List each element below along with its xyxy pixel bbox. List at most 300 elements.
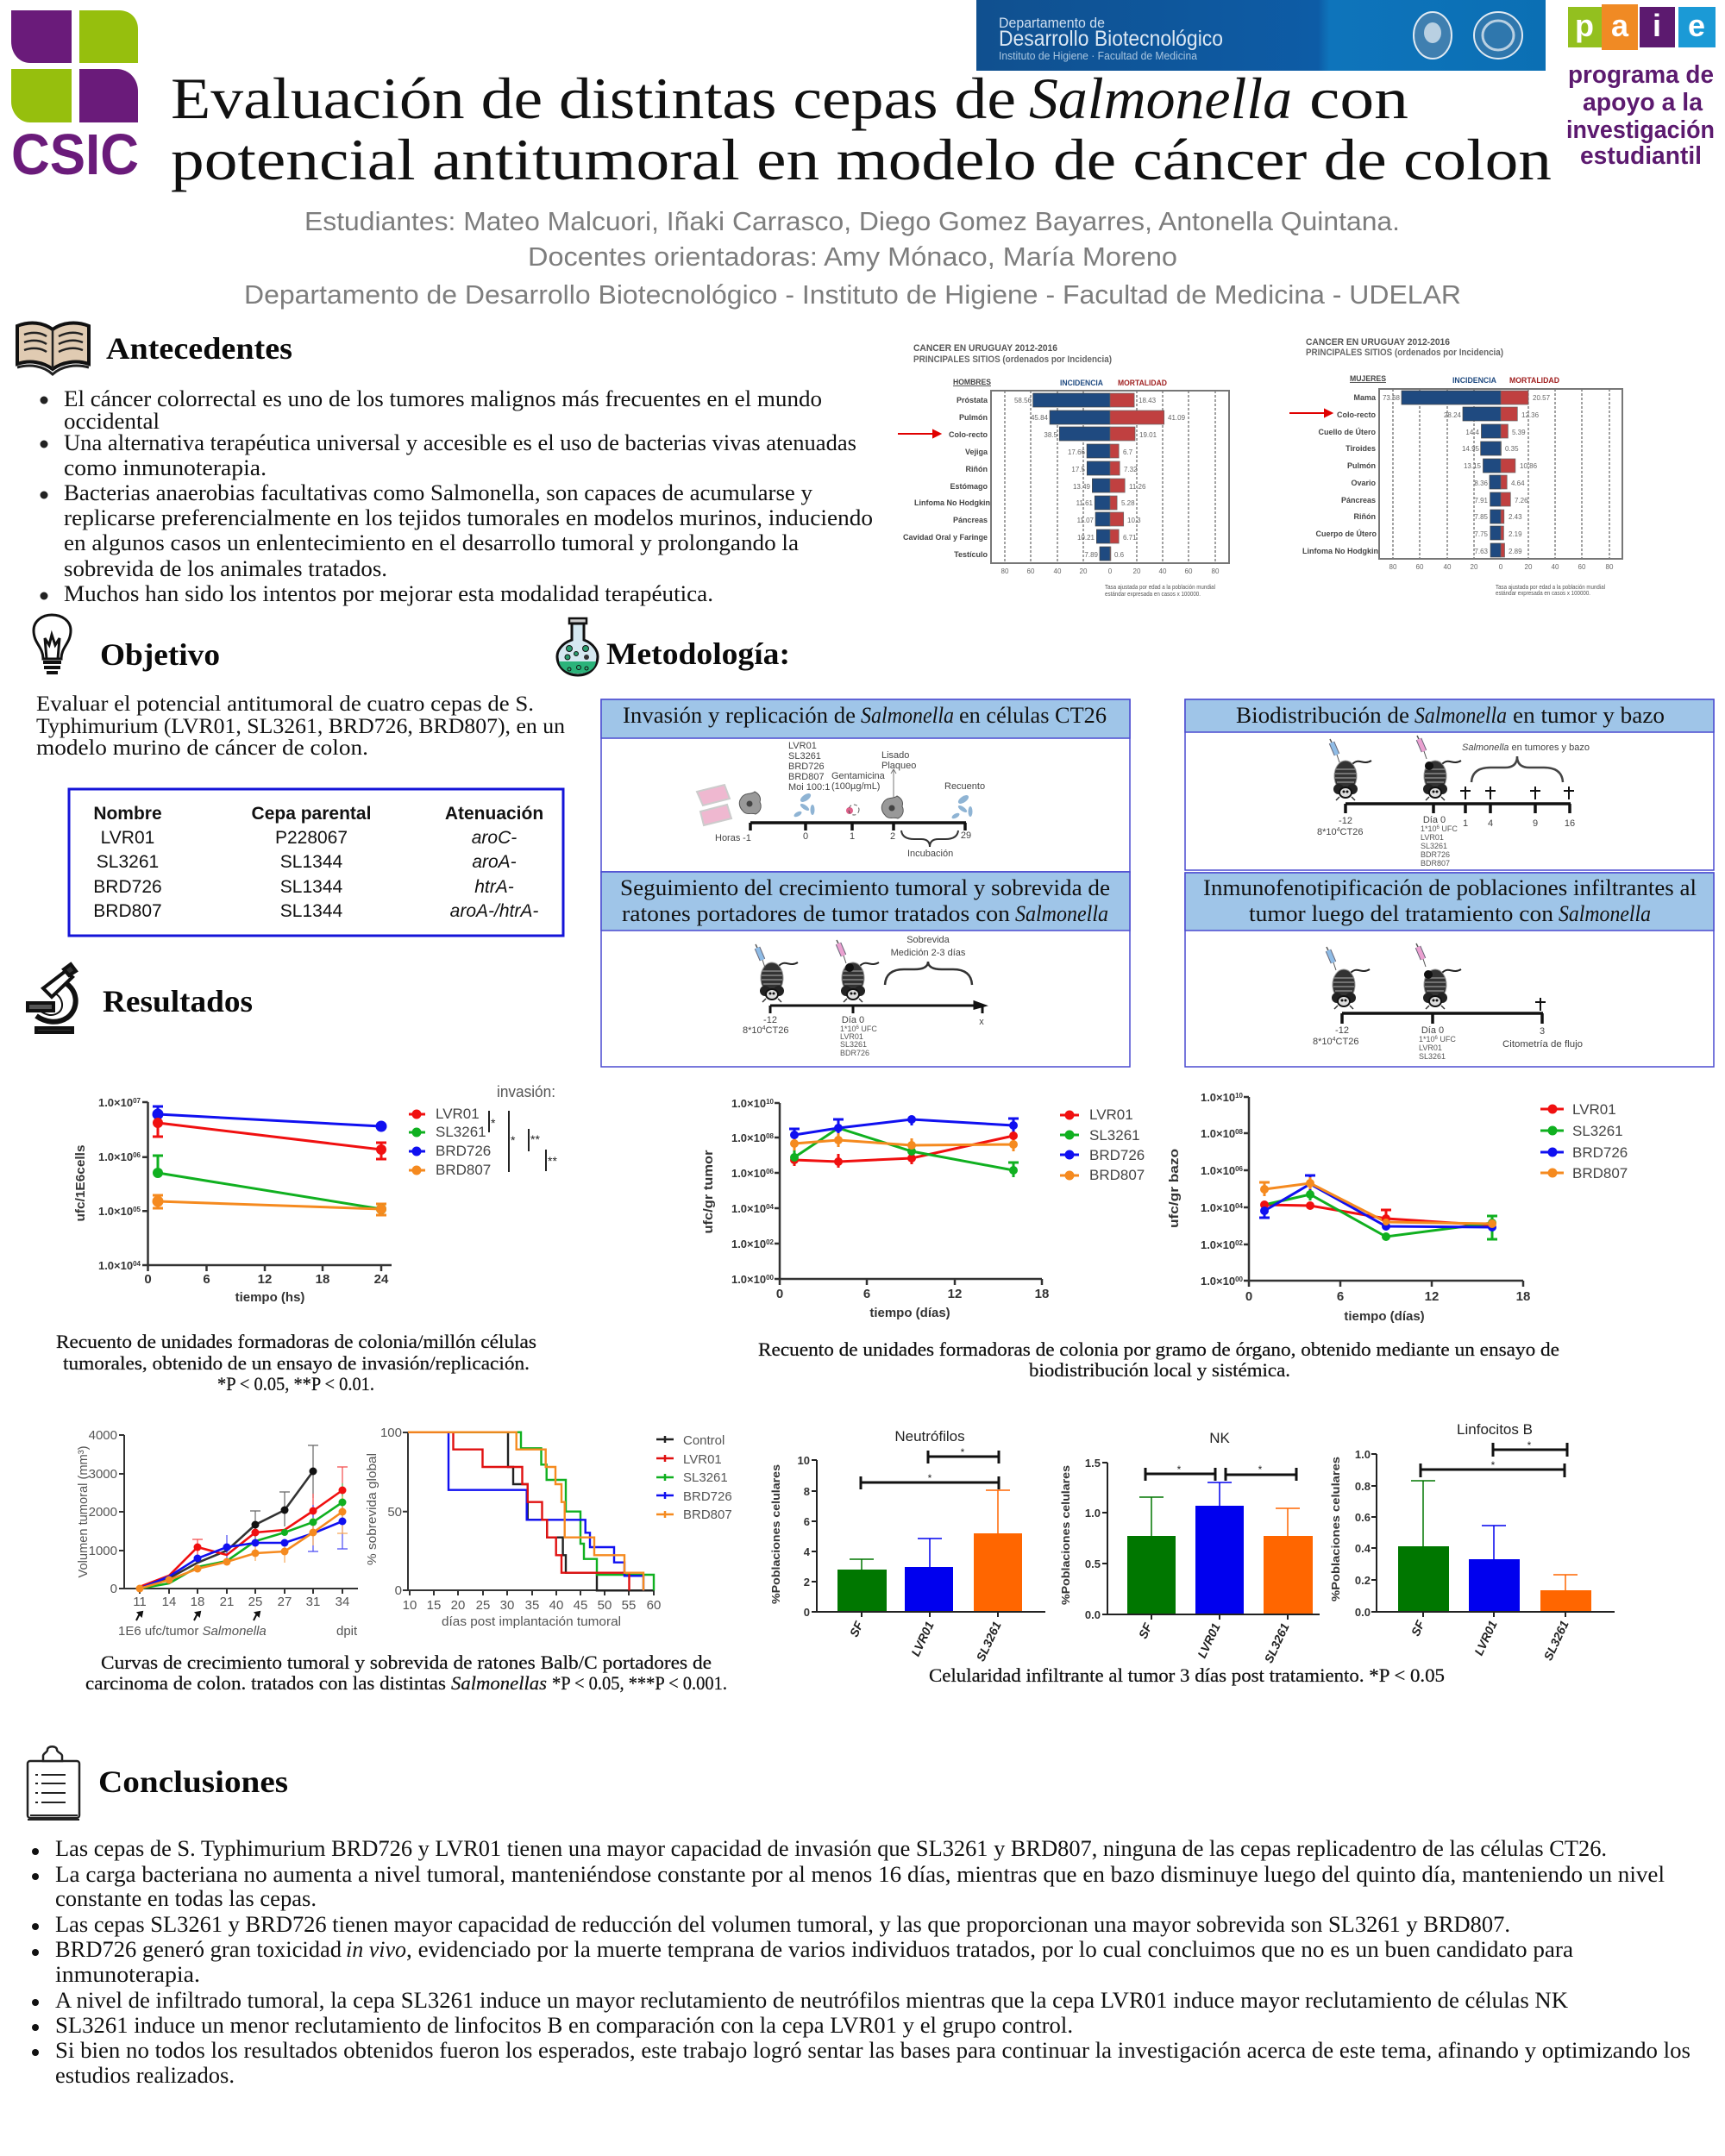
legend [656, 1433, 732, 1522]
chart: Linfocitos B: 0.2 [1355, 1574, 1371, 1587]
legend: LVR01 [683, 1452, 722, 1467]
timeline labels: BDR726 [840, 1049, 869, 1057]
legend: BRD726 [436, 1143, 491, 1159]
chart: NK: 1.0 [1085, 1507, 1101, 1520]
chart: ufc/gr tumor: 1.0×10 [731, 1202, 766, 1215]
chart: cáncer en Uruguay, mujeres: 8.36 [1474, 479, 1489, 487]
timeline labels: 6 [1435, 1036, 1439, 1041]
chart: ufc/gr bazo: 00 [1235, 1275, 1244, 1283]
legend: LVR01 [436, 1106, 480, 1122]
legend: SL3261 [1572, 1123, 1623, 1139]
legend: BRD807 [436, 1162, 491, 1178]
chart: volumen tumoral: 27 [278, 1595, 292, 1609]
timeline labels: 3 [1540, 1026, 1545, 1037]
chart: cáncer en Uruguay, hombres: estándar expresada en casos x 100000. [1105, 590, 1201, 598]
chart: volumen tumoral: 3000 [89, 1467, 117, 1482]
timeline labels: 6 [856, 1025, 860, 1031]
legend: BRD726 [683, 1489, 732, 1504]
caption: invasión: tumorales, obtenido de un ensayo de invasión/replicación. [63, 1352, 530, 1374]
timeline labels: BDR726 [1421, 850, 1450, 859]
caption: invasión: *P < 0.05, **P < 0.01. [217, 1373, 374, 1395]
chart: sobrevida: días post implantación tumoral [442, 1614, 621, 1629]
chart: cáncer en Uruguay, mujeres: 7.26 [1515, 497, 1528, 505]
chart: ufc/gr tumor: 0 [776, 1287, 783, 1301]
chart: cáncer en Uruguay, hombres: INCIDENCIA [1060, 379, 1103, 387]
text block: conclusiones: Las cepas de S. Typhimurium BRD726 y LVR01 tienen una mayor capacidad de invasión que SL3261 y BRD807, ninguna de las cepas replicadentro de las células CT26. [55, 1836, 1607, 1861]
table: cepas: htrA- [474, 877, 514, 897]
chart: Linfocitos B: Linfocitos B [1457, 1421, 1533, 1438]
chart: cáncer en Uruguay, hombres: 7.32 [1124, 466, 1138, 473]
chart: sobrevida: 50 [387, 1505, 402, 1520]
chart: invasión ufc/1E6cells: 24 [374, 1272, 389, 1287]
chart: neutrófilos: 8 [804, 1485, 810, 1498]
chart: sobrevida: 30 [500, 1598, 514, 1613]
table: cepas: P228067 [275, 828, 348, 848]
timeline [750, 823, 966, 830]
timeline labels: 1*10 [840, 1025, 856, 1033]
timeline labels: 4 [762, 1025, 766, 1031]
logo: CSIC [11, 10, 139, 187]
chart: cáncer en Uruguay, hombres: Páncreas [953, 516, 988, 524]
timeline labels: 4 [1333, 1037, 1336, 1043]
chart: cáncer en Uruguay, hombres: 13.49 [1073, 483, 1091, 491]
timeline labels: 1 [1463, 818, 1468, 829]
chart: neutrófilos: %Poblaciones celulares [769, 1464, 782, 1604]
text block: antecedentes [40, 386, 873, 606]
chart: cáncer en Uruguay, mujeres: 2.43 [1509, 513, 1522, 521]
timeline labels: UFC [1440, 824, 1458, 833]
chart: cáncer en Uruguay, hombres: 10.3 [1127, 517, 1141, 524]
text block: conclusiones: constante en todas las cepas. [55, 1886, 317, 1911]
chart: cáncer en Uruguay, hombres: Próstata [957, 396, 988, 404]
chart: cáncer en Uruguay, mujeres: 20.57 [1533, 394, 1551, 402]
banner: Departamento de Desarrollo Biotecnológico: Instituto de Higiene · Facultad de Medicina [999, 49, 1198, 62]
chart: volumen tumoral [76, 1428, 358, 1639]
caption: crecimiento y sobrevida: Curvas de crecimiento tumoral y sobrevida de ratones Balb/C portadores de [101, 1651, 712, 1673]
chart: volumen tumoral: 1000 [89, 1544, 117, 1558]
chart: ufc/gr tumor: 00 [766, 1274, 775, 1282]
chart: cáncer en Uruguay, mujeres: Ovario [1351, 479, 1376, 487]
timeline labels: 1 [850, 831, 855, 842]
chart: cáncer en Uruguay, hombres: HOMBRES [953, 378, 991, 386]
icon: mice and syringes [1330, 736, 1461, 800]
significance: * [491, 1116, 496, 1130]
timeline labels: Sobrevida [906, 935, 950, 945]
chart: neutrófilos: * [928, 1472, 932, 1484]
timeline labels: UFC [859, 1025, 877, 1033]
timeline labels: CT26 [1336, 1037, 1358, 1047]
timeline labels: 9 [1533, 818, 1538, 829]
panel: seguimiento del crecimiento tumoral [601, 872, 1130, 1067]
icon: open book [17, 323, 89, 374]
text block: antecedentes: Bacterias anaerobias facultativas como Salmonella, son capaces de acumularse y [64, 480, 812, 505]
text block: conclusiones: Las cepas SL3261 y BRD726 tienen mayor capacidad de reducción del volumen tumoral, y las que proporcionan una mayor sobrevida son SL3261 y BRD807. [55, 1912, 1510, 1937]
timeline labels: Día 0 [1421, 1025, 1444, 1036]
chart: cáncer en Uruguay, mujeres: PRINCIPALES SITIOS (ordenados por Incidencia) [1306, 348, 1503, 358]
table: cepas: BRD726 [93, 877, 162, 897]
chart: cáncer en Uruguay, hombres: Pulmón [959, 413, 988, 422]
chart: sobrevida: 25 [476, 1598, 490, 1613]
chart: cáncer en Uruguay, mujeres: 2.89 [1509, 548, 1522, 555]
chart: sobrevida: % sobrevida global [365, 1453, 380, 1565]
chart: cáncer en Uruguay, mujeres: MUJERES [1350, 374, 1386, 383]
text block: antecedentes: en algunos casos un enlentecimiento en el desarrollo tumoral y prolongando la [64, 530, 799, 555]
chart: cáncer en Uruguay, mujeres: 40 [1444, 563, 1452, 571]
chart: cáncer en Uruguay, hombres: 20 [1133, 567, 1141, 575]
chart: ufc/gr bazo: 10 [1235, 1092, 1244, 1100]
chart: ufc/gr bazo: 08 [1235, 1128, 1244, 1136]
significance: * [511, 1133, 516, 1147]
table: cepas: aroC- [472, 828, 517, 848]
chart: NK: LVR01 [1195, 1620, 1223, 1660]
chart: cáncer en Uruguay, hombres: MORTALIDAD [1118, 379, 1167, 387]
timeline labels: Horas [715, 833, 741, 843]
heading: Antecedentes: Antecedentes [106, 331, 292, 366]
timeline labels: 29 [961, 830, 971, 841]
chart: ufc/gr tumor: 08 [766, 1132, 775, 1140]
authors and affiliation: Docentes orientadoras: Amy Mónaco, María Moreno [528, 241, 1177, 272]
chart: cáncer en Uruguay, hombres: Cavidad Oral y Faringe [903, 533, 988, 542]
table: cepas: LVR01 [101, 828, 154, 848]
chart: sobrevida: 0 [395, 1583, 402, 1598]
icon: light bulb [34, 615, 71, 673]
chart: cáncer en Uruguay, mujeres: INCIDENCIA [1452, 376, 1496, 385]
chart: neutrófilos: 10 [798, 1454, 810, 1467]
chart: cáncer en Uruguay, hombres: Linfoma No Hodgkin [914, 498, 990, 507]
title: Salmonella [1029, 66, 1292, 131]
chart: cáncer en Uruguay, mujeres: 0 [1499, 563, 1503, 571]
chart: cáncer en Uruguay, hombres: 5.28 [1121, 499, 1135, 507]
chart: cáncer en Uruguay, hombres: 40 [1159, 567, 1167, 575]
chart: cáncer en Uruguay, mujeres: Mama [1353, 393, 1377, 402]
icon: culture plates [697, 785, 731, 825]
timeline labels: BDR807 [1421, 859, 1450, 868]
text block: conclusiones: A nivel de infiltrado tumoral, la cepa SL3261 induce un mayor reclutamiento de neutrófilos mientras que la cepa LVR01 induce mayor reclutamiento de células NK [55, 1988, 1568, 2013]
chart: cáncer en Uruguay, mujeres: 12.36 [1521, 411, 1540, 419]
chart: cáncer en Uruguay, hombres: 38.5 [1044, 431, 1058, 439]
table: cepas: aroA- [472, 852, 517, 872]
chart: neutrófilos: SL3261 [973, 1619, 1004, 1664]
timeline labels: Recuento [944, 781, 985, 792]
panel: invasión y replicación: Salmonella [861, 702, 954, 728]
panel: invasión y replicación [601, 699, 1130, 872]
chart: invasión ufc/1E6cells: 04 [133, 1260, 141, 1268]
chart: sobrevida: 100 [380, 1426, 402, 1440]
text block: conclusiones: estudios realizados. [55, 2063, 235, 2088]
chart: cáncer en Uruguay, hombres: 17.66 [1068, 448, 1086, 456]
chart: neutrófilos: * [961, 1446, 965, 1458]
chart: neutrófilos: 6 [804, 1515, 810, 1528]
chart: NK: SL3261 [1261, 1620, 1292, 1665]
chart: invasión ufc/1E6cells: tiempo (hs) [235, 1290, 304, 1305]
chart: sobrevida: 15 [427, 1598, 441, 1613]
timeline [1346, 804, 1571, 813]
timeline labels: LVR01 [788, 741, 817, 751]
chart: ufc/gr tumor: 1.0×10 [731, 1273, 766, 1286]
arrow: colo-recto mujeres [1289, 410, 1332, 417]
chart: ufc/gr tumor: 18 [1035, 1287, 1049, 1301]
chart: cáncer en Uruguay, mujeres: Cuerpo de Útero [1315, 529, 1377, 538]
timeline labels [1313, 1025, 1583, 1061]
chart: cáncer en Uruguay, hombres: 6.71 [1123, 534, 1137, 542]
timeline labels: SL3261 [840, 1040, 867, 1049]
text block: objetivo: Evaluar el potencial antitumoral de cuatro cepas de S. [36, 691, 534, 716]
panel: biodistribución: Salmonella [1414, 702, 1507, 728]
table: cepas: SL3261 [97, 852, 159, 872]
timeline labels [715, 741, 985, 859]
timeline labels: x [979, 1017, 984, 1027]
chart: cáncer en Uruguay, hombres: 58.56 [1014, 397, 1032, 404]
icon: tumor cells [739, 792, 903, 818]
chart: NK: SF [1136, 1620, 1155, 1640]
caption: crecimiento y sobrevida: Salmonellas [451, 1672, 547, 1694]
chart: cáncer en Uruguay, hombres: 0.6 [1114, 551, 1125, 559]
chart: ufc/gr bazo: ufc/gr bazo [1167, 1149, 1182, 1228]
chart: cáncer en Uruguay, mujeres: Riñón [1354, 512, 1376, 521]
text block: conclusiones: SL3261 induce un menor reclutamiento de linfocitos B en comparación con la cepa LVR01 y el grupo control. [55, 2013, 1073, 2038]
chart: ufc/gr tumor: 06 [766, 1168, 775, 1175]
timeline labels [1317, 743, 1590, 868]
chart: NK: %Poblaciones celulares [1059, 1465, 1072, 1605]
panel: invasión y replicación: en células CT26 [959, 702, 1107, 728]
chart: invasión ufc/1E6cells: 1.0×10 [98, 1096, 133, 1109]
chart: cáncer en Uruguay, mujeres: 60 [1578, 563, 1586, 571]
text block: conclusiones: , evidenciado por la muerte temprana de varios individuos tratados, por lo cual concluimos que no es un buen candidato para [406, 1937, 1573, 1962]
title: Evaluación de distintas cepas de [171, 66, 1016, 131]
chart: cáncer en Uruguay, mujeres: 40 [1552, 563, 1559, 571]
chart: cáncer en Uruguay, mujeres: 28.24 [1444, 411, 1462, 419]
chart: cáncer en Uruguay, mujeres: Tasa ajustada por edad a la población mundial [1496, 583, 1605, 591]
legend: BRD726 [1089, 1147, 1145, 1163]
timeline labels: (100µg/mL) [831, 781, 880, 792]
chart: cáncer en Uruguay, mujeres: 14.4 [1465, 429, 1480, 436]
panel: inmunofenotipificación: tumor luego del tratamiento con [1249, 900, 1553, 926]
caption: biodistribución: Recuento de unidades formadoras de colonia por gramo de órgano, obtenido mediante un ensayo de [758, 1338, 1559, 1360]
chart: cáncer en Uruguay, hombres: Estómago [950, 482, 988, 491]
timeline labels: UFC [1438, 1035, 1456, 1044]
chart: cáncer en Uruguay, hombres: 18.43 [1138, 397, 1157, 404]
table: cepas [69, 789, 563, 936]
chart: cáncer en Uruguay, mujeres: 60 [1416, 563, 1424, 571]
chart: ufc/gr bazo: 04 [1235, 1202, 1244, 1210]
timeline [770, 1002, 984, 1013]
panel: invasión y replicación: Invasión y replicación de [623, 702, 856, 728]
chart: neutrófilos: 0 [804, 1606, 810, 1619]
chart: cáncer en Uruguay, hombres: 6.7 [1123, 448, 1133, 456]
chart: cáncer en Uruguay, hombres: 11.26 [1129, 483, 1146, 491]
chart: neutrófilos: 4 [804, 1545, 811, 1558]
chart: ufc/gr tumor: 1.0×10 [731, 1238, 766, 1250]
chart: cáncer en Uruguay, hombres: 10.21 [1077, 534, 1095, 542]
chart: invasión ufc/1E6cells: ufc/1E6cells [73, 1145, 88, 1221]
logo: PAIE programa de apoyo a la investigación estudiantil: e [1688, 8, 1705, 43]
chart: cáncer en Uruguay, mujeres: 4.64 [1511, 479, 1525, 487]
logo: PAIE programa de apoyo a la investigación estudiantil: apoyo a la [1583, 89, 1703, 116]
text block: conclusiones: BRD726 generó gran toxicidad [55, 1937, 342, 1962]
chart: cáncer en Uruguay, hombres: Vejiga [965, 448, 988, 456]
caption: biodistribución: biodistribución local y sistémica. [1029, 1359, 1290, 1381]
chart: ufc/gr bazo: 1.0×10 [1201, 1201, 1235, 1214]
chart: invasión ufc/1E6cells: 1.0×10 [98, 1150, 133, 1163]
timeline labels: Día 0 [1423, 815, 1446, 825]
chart: volumen tumoral: 2000 [89, 1505, 117, 1520]
chart: cáncer en Uruguay, hombres: 80 [1001, 567, 1009, 575]
panel: seguimiento del crecimiento tumoral: Salmonella [1015, 900, 1108, 926]
panel: inmunofenotipificación [1185, 873, 1714, 1067]
chart: cáncer en Uruguay, mujeres: 2.19 [1509, 530, 1522, 538]
legend: SL3261 [683, 1470, 728, 1485]
chart: cáncer en Uruguay, hombres: 80 [1212, 567, 1220, 575]
chart: volumen tumoral: 18 [191, 1595, 204, 1609]
timeline labels: LVR01 [1421, 833, 1444, 842]
timeline labels: BRD726 [788, 761, 825, 772]
chart: ufc/gr bazo: 12 [1425, 1289, 1439, 1304]
table: cepas: Cepa parental [252, 804, 371, 824]
chart: cáncer en Uruguay, hombres: PRINCIPALES SITIOS (ordenados por Incidencia) [913, 354, 1112, 365]
chart: ufc/gr bazo [1167, 1091, 1628, 1324]
chart: cáncer en Uruguay, mujeres: Páncreas [1341, 496, 1376, 505]
authors and affiliation [244, 206, 1461, 310]
chart: cáncer en Uruguay, hombres: 0 [1108, 567, 1113, 575]
chart: ufc/gr tumor: 10 [766, 1098, 775, 1106]
chart: Linfocitos B: 0.4 [1355, 1542, 1371, 1555]
chart: cáncer en Uruguay, hombres: Colo-recto [949, 430, 988, 439]
chart: sobrevida: 55 [622, 1598, 636, 1613]
legend: BRD807 [1572, 1165, 1628, 1181]
timeline labels: LVR01 [840, 1032, 863, 1041]
panel: inmunofenotipificación: Salmonella [1559, 900, 1651, 926]
table: cepas: Nombre [93, 804, 162, 824]
chart: cáncer en Uruguay, mujeres: Pulmón [1347, 461, 1376, 470]
timeline labels: 1*10 [1421, 824, 1437, 833]
chart: cáncer en Uruguay, mujeres: 10.86 [1520, 462, 1538, 470]
panel: biodistribución [1185, 699, 1714, 870]
chart: cáncer en Uruguay, mujeres: 73.68 [1383, 394, 1401, 402]
chart: cáncer en Uruguay, mujeres: 20 [1471, 563, 1478, 571]
chart: cáncer en Uruguay, hombres: 45.84 [1031, 414, 1049, 422]
chart: ufc/gr bazo: 02 [1235, 1239, 1244, 1247]
chart: Linfocitos B [1329, 1421, 1615, 1663]
chart: ufc/gr tumor: 1.0×10 [731, 1131, 766, 1144]
timeline labels: Incubación [907, 849, 953, 859]
chart: cáncer en Uruguay, mujeres: 0.35 [1505, 445, 1519, 453]
text block: antecedentes: replicarse preferencialmente en los tejidos tumorales en modelos murinos, induciendo [64, 505, 873, 530]
timeline labels: -12 [1335, 1025, 1349, 1036]
chart: invasión ufc/1E6cells: 07 [133, 1097, 141, 1105]
heading: Conclusiones: Conclusiones [98, 1764, 288, 1799]
panel: biodistribución: Biodistribución de [1236, 702, 1409, 728]
authors and affiliation: Estudiantes: Mateo Malcuori, Iñaki Carrasco, Diego Gomez Bayarres, Antonella Quintana. [304, 206, 1400, 236]
chart: volumen tumoral: 4000 [89, 1428, 117, 1443]
chart: sobrevida: 40 [549, 1598, 563, 1613]
legend [409, 1106, 491, 1178]
chart: sobrevida: 10 [403, 1598, 417, 1613]
timeline labels: -12 [763, 1015, 777, 1025]
text block: conclusiones: inmunoterapia. [55, 1962, 200, 1987]
chart: volumen tumoral: 34 [336, 1595, 349, 1609]
chart: NK: NK [1209, 1430, 1230, 1446]
chart: ufc/gr tumor: 6 [863, 1287, 870, 1301]
panel: seguimiento del crecimiento tumoral: ratones portadores de tumor tratados con [622, 900, 1010, 926]
chart: cáncer en Uruguay, mujeres: MORTALIDAD [1509, 376, 1559, 385]
chart: NK: 0.5 [1085, 1557, 1101, 1570]
chart: ufc/gr bazo: 18 [1516, 1289, 1530, 1304]
chart: cáncer en Uruguay, hombres: 11.61 [1076, 499, 1094, 507]
chart: volumen tumoral: 21 [220, 1595, 234, 1609]
table: cepas: BRD807 [93, 901, 162, 921]
chart: Linfocitos B: LVR01 [1471, 1618, 1500, 1658]
chart: ufc/gr tumor: ufc/gr tumor [701, 1150, 716, 1233]
banner: Departamento de Desarrollo Biotecnológico: Desarrollo Biotecnológico [999, 27, 1223, 51]
timeline [1342, 1013, 1543, 1024]
chart: Linfocitos B: 0.8 [1355, 1480, 1371, 1493]
timeline labels: BRD807 [788, 772, 825, 782]
timeline labels: Día 0 [842, 1015, 864, 1025]
logo: PAIE programa de apoyo a la investigación estudiantil: a [1611, 8, 1629, 43]
icon: mice and syringes [756, 940, 879, 1002]
chart: volumen tumoral: 31 [306, 1595, 320, 1609]
text block: antecedentes: como inmunoterapia. [64, 455, 267, 480]
text block: antecedentes: occidental [64, 409, 160, 434]
timeline labels: -1 [743, 833, 751, 843]
chart: volumen tumoral: Volumen tumoral (mm³) [76, 1445, 91, 1578]
legend [1060, 1106, 1145, 1183]
chart: ufc/gr tumor: 1.0×10 [731, 1167, 766, 1180]
chart: cáncer en Uruguay, mujeres: estándar expresada en casos x 100000. [1496, 589, 1590, 597]
text block: conclusiones: Si bien no todos los resultados obtenidos fueron los esperados, este trabajo logró sentar las bases para continuar la investigación acerca de este tema, afinando y optimizando los [55, 2038, 1690, 2063]
chart: NK: 1.5 [1085, 1457, 1101, 1470]
chart: cáncer en Uruguay, mujeres: 7.85 [1474, 513, 1489, 521]
crosses [1460, 787, 1574, 799]
chart: ufc/gr bazo: 1.0×10 [1201, 1127, 1235, 1140]
chart: neutrófilos: LVR01 [908, 1619, 937, 1658]
chart: sobrevida: 45 [574, 1598, 587, 1613]
timeline labels: 0 [803, 831, 808, 842]
text block: antecedentes: sobrevida de los animales tratados. [64, 556, 387, 581]
chart: invasión ufc/1E6cells: 06 [133, 1151, 141, 1159]
text block: antecedentes: Muchos han sido los intentos por mejorar esta modalidad terapéutica. [64, 581, 713, 606]
chart: Linfocitos B: * [1491, 1459, 1496, 1471]
chart: sobrevida: 60 [647, 1598, 661, 1613]
chart: Linfocitos B: 1.0 [1355, 1448, 1371, 1461]
timeline labels: LVR01 [1419, 1044, 1442, 1052]
chart: cáncer en Uruguay, hombres: Tasa ajustada por edad a la población mundial [1105, 583, 1215, 591]
timeline labels: Salmonella [1462, 743, 1509, 753]
chart: invasión ufc/1E6cells: 6 [203, 1272, 210, 1287]
chart: cáncer en Uruguay, hombres [903, 343, 1229, 598]
chart: cáncer en Uruguay, hombres: 7.89 [1084, 551, 1099, 559]
chart: neutrófilos: Neutrófilos [894, 1428, 965, 1445]
text block: antecedentes: Una alternativa terapéutica universal y accesible es el uso de bacterias vivas atenuadas [64, 430, 856, 455]
chart: cáncer en Uruguay, mujeres: 80 [1389, 563, 1397, 571]
banner: Departamento de Desarrollo Biotecnológico: Departamento de [999, 15, 1105, 31]
timeline labels: 8*10 [743, 1025, 762, 1036]
icon: gentamicin [846, 805, 859, 815]
timeline labels: Plaqueo [881, 761, 916, 771]
chart: cáncer en Uruguay, mujeres: CANCER EN URUGUAY 2012-2016 [1306, 337, 1450, 348]
chart: invasión ufc/1E6cells: 0 [144, 1272, 152, 1287]
chart: invasión ufc/1E6cells [73, 1083, 557, 1305]
chart: neutrófilos [769, 1428, 1045, 1664]
significance: ** [548, 1154, 557, 1168]
timeline labels: 4 [1337, 827, 1340, 833]
chart: Linfocitos B: 0.6 [1355, 1511, 1371, 1524]
timeline labels: Gentamicina [831, 771, 886, 781]
chart: cáncer en Uruguay, hombres: 60 [1027, 567, 1035, 575]
legend: SL3261 [1089, 1127, 1140, 1144]
legend: Control [683, 1433, 724, 1448]
legend: LVR01 [1089, 1106, 1133, 1123]
